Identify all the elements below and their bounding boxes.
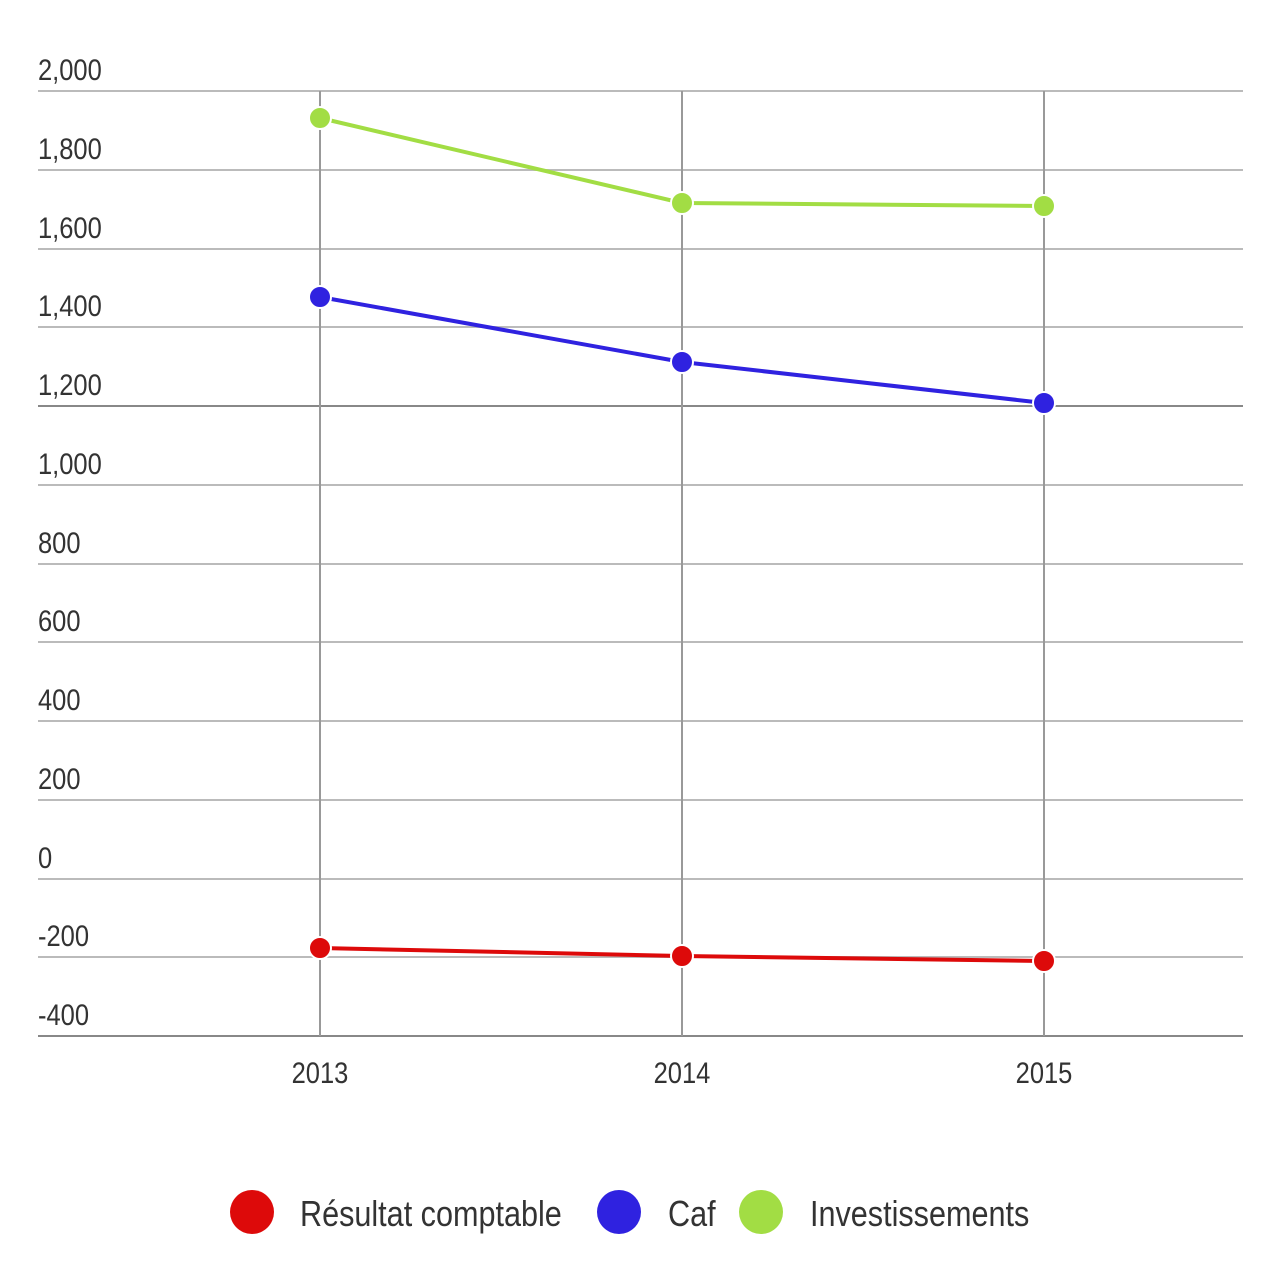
y axis labels: 600 <box>38 604 81 637</box>
y axis labels: 1,200 <box>38 368 102 401</box>
series: Investissements <box>309 107 1055 217</box>
x axis labels: 2013 <box>292 1056 348 1089</box>
y axis labels: 0 <box>38 841 52 874</box>
y axis labels: 400 <box>38 683 81 716</box>
y axis labels: 1,400 <box>38 289 102 322</box>
y axis labels: 800 <box>38 526 81 559</box>
legend: Investissements <box>810 1195 1029 1235</box>
x axis labels: 2014 <box>654 1056 710 1089</box>
x axis labels <box>292 1056 1072 1089</box>
y axis labels: 200 <box>38 762 81 795</box>
legend <box>230 1190 1029 1235</box>
y axis labels: 1,800 <box>38 132 102 165</box>
y axis labels: 2,000 <box>38 53 102 86</box>
y axis labels <box>38 53 102 1031</box>
y axis labels: 1,600 <box>38 211 102 244</box>
y axis labels: -400 <box>38 998 89 1031</box>
series: Caf <box>309 286 1055 414</box>
legend: Résultat comptable <box>300 1195 562 1235</box>
legend: Caf <box>668 1195 716 1235</box>
y axis labels: -200 <box>38 919 89 952</box>
x axis labels: 2015 <box>1016 1056 1072 1089</box>
series: Résultat comptable <box>309 937 1055 972</box>
y axis labels: 1,000 <box>38 447 102 480</box>
